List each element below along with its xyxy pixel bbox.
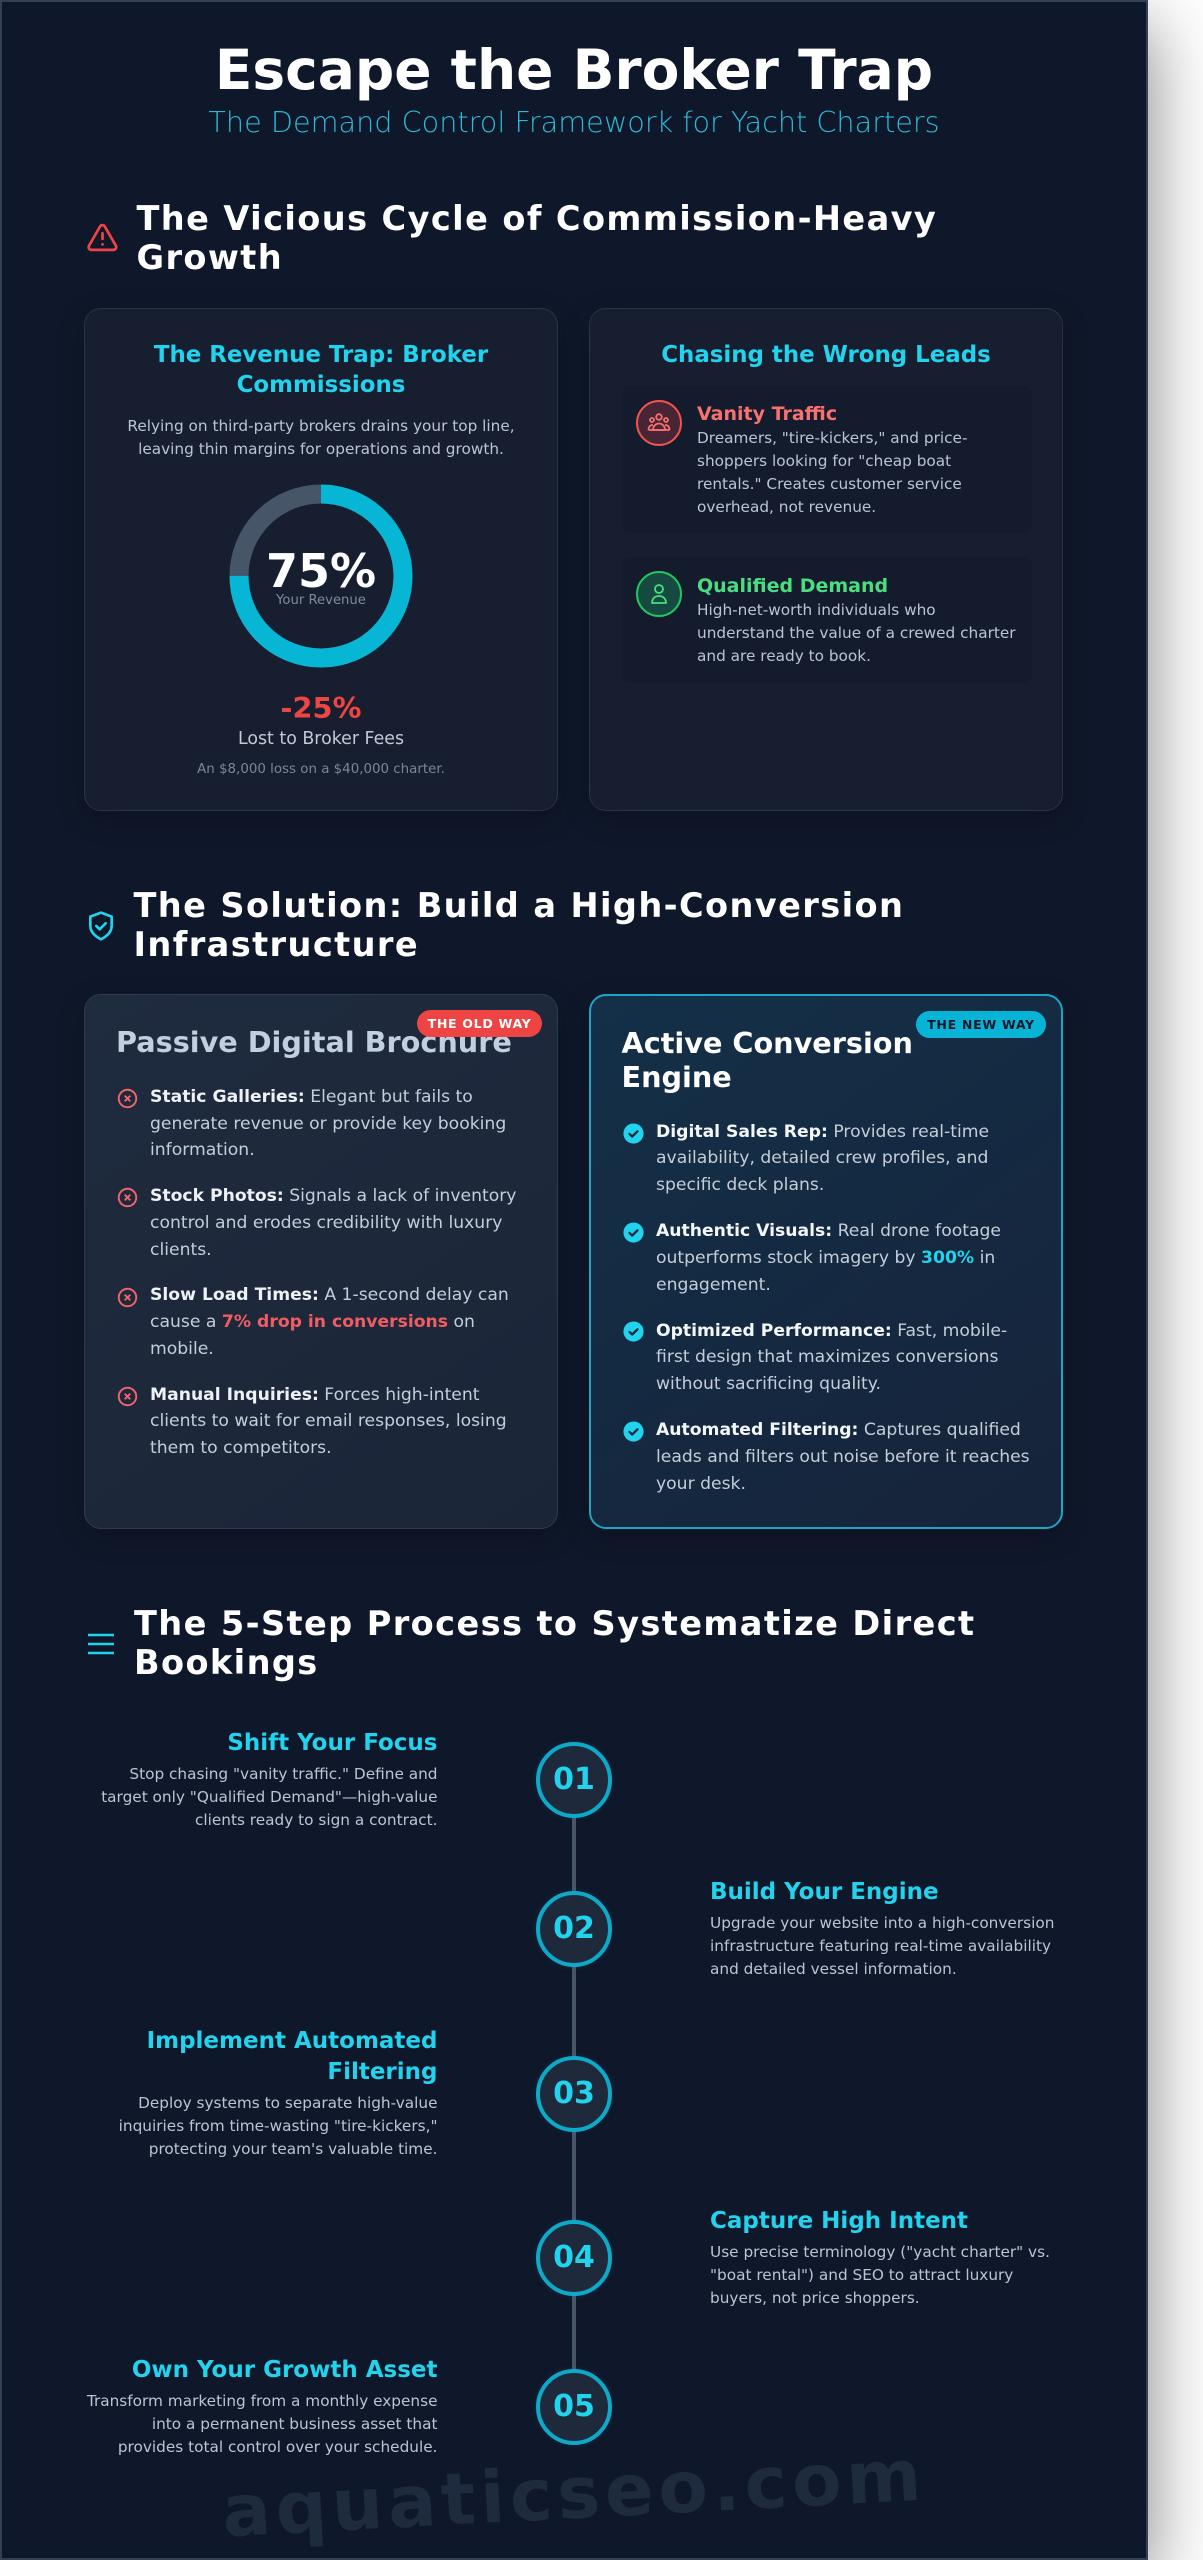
step 2 description: and detailed vessel information. xyxy=(710,1960,957,1978)
heading: five-step process: The 5-Step Process to Systematize Direct xyxy=(134,1604,975,1643)
card heading: Commissions xyxy=(237,372,405,398)
title: Escape the Broker Trap xyxy=(215,38,933,102)
lead block: qualified demand xyxy=(622,557,1032,683)
step 1 number xyxy=(536,1742,612,1818)
icon: person xyxy=(636,571,682,617)
icon: x circle xyxy=(118,1188,138,1208)
lead text: rentals." Creates customer service xyxy=(697,475,962,493)
lead title: Vanity Traffic xyxy=(697,403,837,425)
step 4 description: Use precise terminology ("yacht charter" vs. xyxy=(710,2242,1050,2260)
lead text: understand the value of a crewed charter xyxy=(697,624,1016,642)
step 4 title: Capture High Intent xyxy=(710,2208,968,2234)
step 3 number xyxy=(536,2056,612,2132)
lead text xyxy=(697,601,1016,665)
list item: stock photos: clients. xyxy=(150,1240,212,1260)
step 2 description xyxy=(710,1914,1054,1978)
donut label: Your Revenue xyxy=(276,593,366,608)
list item: stock photos: Stock Photos: Signals a lack of inventory xyxy=(150,1186,516,1206)
subtitle: The Demand Control Framework for Yacht Charters xyxy=(208,105,940,139)
panel: revenue trap xyxy=(84,308,558,811)
donut chart: 75 percent revenue xyxy=(230,484,412,668)
step 5 number xyxy=(536,2369,612,2445)
list item: manual inquiries: them to competitors. xyxy=(150,1438,332,1458)
list item: stock photos xyxy=(150,1186,516,1260)
step 3 description: inquiries from time-wasting "tire-kickers," xyxy=(119,2116,438,2134)
list item: authentic visuals xyxy=(656,1221,1001,1295)
badge: the new way xyxy=(916,1011,1046,1038)
step 3 description: protecting your team's valuable time. xyxy=(149,2140,438,2158)
step 1 title: Shift Your Focus xyxy=(227,1730,438,1756)
step 4 description: "boat rental") and SEO to attract luxury xyxy=(710,2266,1013,2284)
lead text xyxy=(697,429,967,516)
list item: manual inquiries: clients to wait for email responses, losing xyxy=(150,1411,507,1431)
step 5 description: into a permanent business asset that xyxy=(152,2414,438,2432)
timeline connector line xyxy=(572,1780,576,2407)
panel: active conversion engine xyxy=(589,994,1063,1529)
card heading: Passive Digital Brochure xyxy=(116,1025,512,1059)
list item: slow load times: mobile. xyxy=(150,1339,214,1359)
card heading: The Revenue Trap: Broker xyxy=(154,342,488,368)
lead text: High-net-worth individuals who xyxy=(697,601,936,619)
step 5 number: 05 xyxy=(553,2389,595,2424)
step 2 description: infrastructure featuring real-time availability xyxy=(710,1936,1051,1954)
step 3 number: 03 xyxy=(553,2076,595,2110)
loss label: Lost to Broker Fees xyxy=(238,729,404,749)
card description: leaving thin margins for operations and growth. xyxy=(138,440,504,458)
step 2 number xyxy=(536,1891,612,1967)
step 3 title: Filtering xyxy=(327,2059,438,2085)
list item: optimized performance: Optimized Performance: Fast, mobile- xyxy=(656,1320,1007,1340)
icon: x circle xyxy=(118,1088,138,1108)
list item: manual inquiries: Manual Inquiries: Forces high-intent xyxy=(150,1384,480,1404)
step 1 text xyxy=(101,1730,438,1828)
step 1 description: target only "Qualified Demand"—high-value xyxy=(101,1788,438,1806)
list item: optimized performance: without sacrificing quality. xyxy=(656,1374,881,1394)
lead block: vanity traffic xyxy=(622,386,1032,533)
step 4 description xyxy=(710,2242,1050,2306)
step 4 number: 04 xyxy=(553,2240,595,2275)
icon: x circle xyxy=(118,1288,138,1308)
list item: digital sales rep: specific deck plans. xyxy=(656,1175,824,1195)
list item: static galleries: information. xyxy=(150,1140,255,1160)
heading: five-step process xyxy=(134,1604,975,1682)
step 3 description xyxy=(119,2094,438,2158)
heading: the solution: Infrastructure xyxy=(134,925,419,964)
panel: chasing the wrong leads xyxy=(589,308,1063,811)
step 1 number: 01 xyxy=(553,1762,595,1797)
heading: the solution xyxy=(134,886,904,964)
badge: the old way: THE OLD WAY xyxy=(428,1016,531,1031)
badge: the new way: THE NEW WAY xyxy=(927,1017,1035,1032)
heading: vicious cycle: Growth xyxy=(136,238,283,277)
card description: Relying on third-party brokers drains your top line, xyxy=(127,417,515,435)
step 3 title xyxy=(147,2028,438,2085)
step 2 text xyxy=(710,1879,1054,1978)
step 5 title: Own Your Growth Asset xyxy=(132,2357,438,2383)
icon: shield check xyxy=(89,911,113,941)
step 4 description: buyers, not price shoppers. xyxy=(710,2288,920,2306)
step 2 description: Upgrade your website into a high-conversion xyxy=(710,1914,1054,1932)
lead text: shoppers looking for "cheap boat xyxy=(697,452,951,470)
list item: manual inquiries xyxy=(150,1384,507,1458)
step 4 text xyxy=(710,2208,1050,2306)
lead text: overhead, not revenue. xyxy=(697,498,876,516)
list item: automated filtering xyxy=(656,1420,1030,1494)
step 5 description xyxy=(87,2390,438,2458)
heading: vicious cycle: The Vicious Cycle of Commission-Heavy xyxy=(136,199,937,238)
icon: warning triangle xyxy=(87,224,118,252)
lead text: Dreamers, "tire-kickers," and price- xyxy=(697,429,967,447)
card heading: Active Conversion xyxy=(622,1026,913,1060)
card heading: Chasing the Wrong Leads xyxy=(661,342,991,368)
list item: automated filtering: Automated Filtering: Captures qualified xyxy=(656,1420,1021,1440)
heading: the solution: The Solution: Build a High-Conversion xyxy=(134,886,904,925)
list item: static galleries: generate revenue or provide key booking xyxy=(150,1114,506,1134)
watermark: aquaticseo.com xyxy=(220,2433,928,2553)
card heading: Engine xyxy=(622,1060,732,1094)
list: old way drawbacks xyxy=(118,1087,516,1458)
loss example: An $8,000 loss on a $40,000 charter. xyxy=(197,762,445,777)
list item: authentic visuals: engagement. xyxy=(656,1275,771,1295)
step 5 description: provides total control over your schedule. xyxy=(118,2438,438,2456)
step 1 description: clients ready to sign a contract. xyxy=(195,1810,438,1828)
heading: five-step process: Bookings xyxy=(134,1643,319,1682)
list item: static galleries: Static Galleries: Elegant but fails to xyxy=(150,1087,473,1107)
list item: authentic visuals: outperforms stock imagery by 300% in xyxy=(656,1248,995,1268)
list item: slow load times: Slow Load Times: A 1-second delay can xyxy=(150,1285,509,1305)
lead title: Qualified Demand xyxy=(697,575,888,597)
badge: the old way xyxy=(417,1010,542,1037)
list item: stock photos: control and erodes credibility with luxury xyxy=(150,1213,502,1233)
step 1 description xyxy=(101,1764,438,1828)
step 5 description: Transform marketing from a monthly expense xyxy=(87,2392,438,2410)
step 5 text xyxy=(60,2362,438,2472)
step 3 title: Implement Automated xyxy=(147,2028,438,2054)
icon: menu lines xyxy=(88,1634,114,1654)
step 1 description: Stop chasing "vanity traffic." Define and xyxy=(129,1764,438,1782)
list item: digital sales rep: availability, detailed crew profiles, and xyxy=(656,1148,988,1168)
list item: optimized performance: first design that maximizes conversions xyxy=(656,1347,998,1367)
list item: optimized performance xyxy=(656,1320,1007,1394)
list item: automated filtering: leads and filters out noise before it reaches xyxy=(656,1447,1030,1467)
step 3 description: Deploy systems to separate high-value xyxy=(138,2094,438,2112)
donut value: 75% xyxy=(266,544,376,598)
card heading xyxy=(154,342,488,398)
list item: slow load times xyxy=(150,1285,509,1359)
icon: group of people xyxy=(636,400,682,446)
step 2 title: Build Your Engine xyxy=(710,1879,939,1905)
icon: check circle xyxy=(623,1322,644,1342)
heading: vicious cycle xyxy=(136,199,937,277)
icon: check circle xyxy=(623,1222,644,1243)
list item: digital sales rep xyxy=(656,1122,989,1195)
list item: slow load times: cause a 7% drop in conversions on xyxy=(150,1312,475,1332)
list item: automated filtering: your desk. xyxy=(656,1474,746,1494)
icon: x circle xyxy=(118,1386,138,1406)
list: new way benefits xyxy=(623,1122,1030,1494)
step 3 text xyxy=(119,2028,438,2158)
step 2 number: 02 xyxy=(553,1911,595,1946)
step 4 number xyxy=(536,2220,612,2296)
timeline: five-step process xyxy=(86,1730,1054,2456)
panel: passive digital brochure xyxy=(84,994,558,1529)
card heading xyxy=(622,1026,913,1094)
icon: check circle xyxy=(623,1124,644,1144)
list item: authentic visuals: Authentic Visuals: Real drone footage xyxy=(656,1221,1001,1241)
loss figure: -25% xyxy=(281,691,361,725)
card description xyxy=(127,417,515,458)
list item: static galleries xyxy=(150,1087,506,1160)
list item: digital sales rep: Digital Sales Rep: Provides real-time xyxy=(656,1122,989,1142)
icon: check circle xyxy=(623,1422,644,1442)
lead text: and are ready to book. xyxy=(697,647,871,665)
